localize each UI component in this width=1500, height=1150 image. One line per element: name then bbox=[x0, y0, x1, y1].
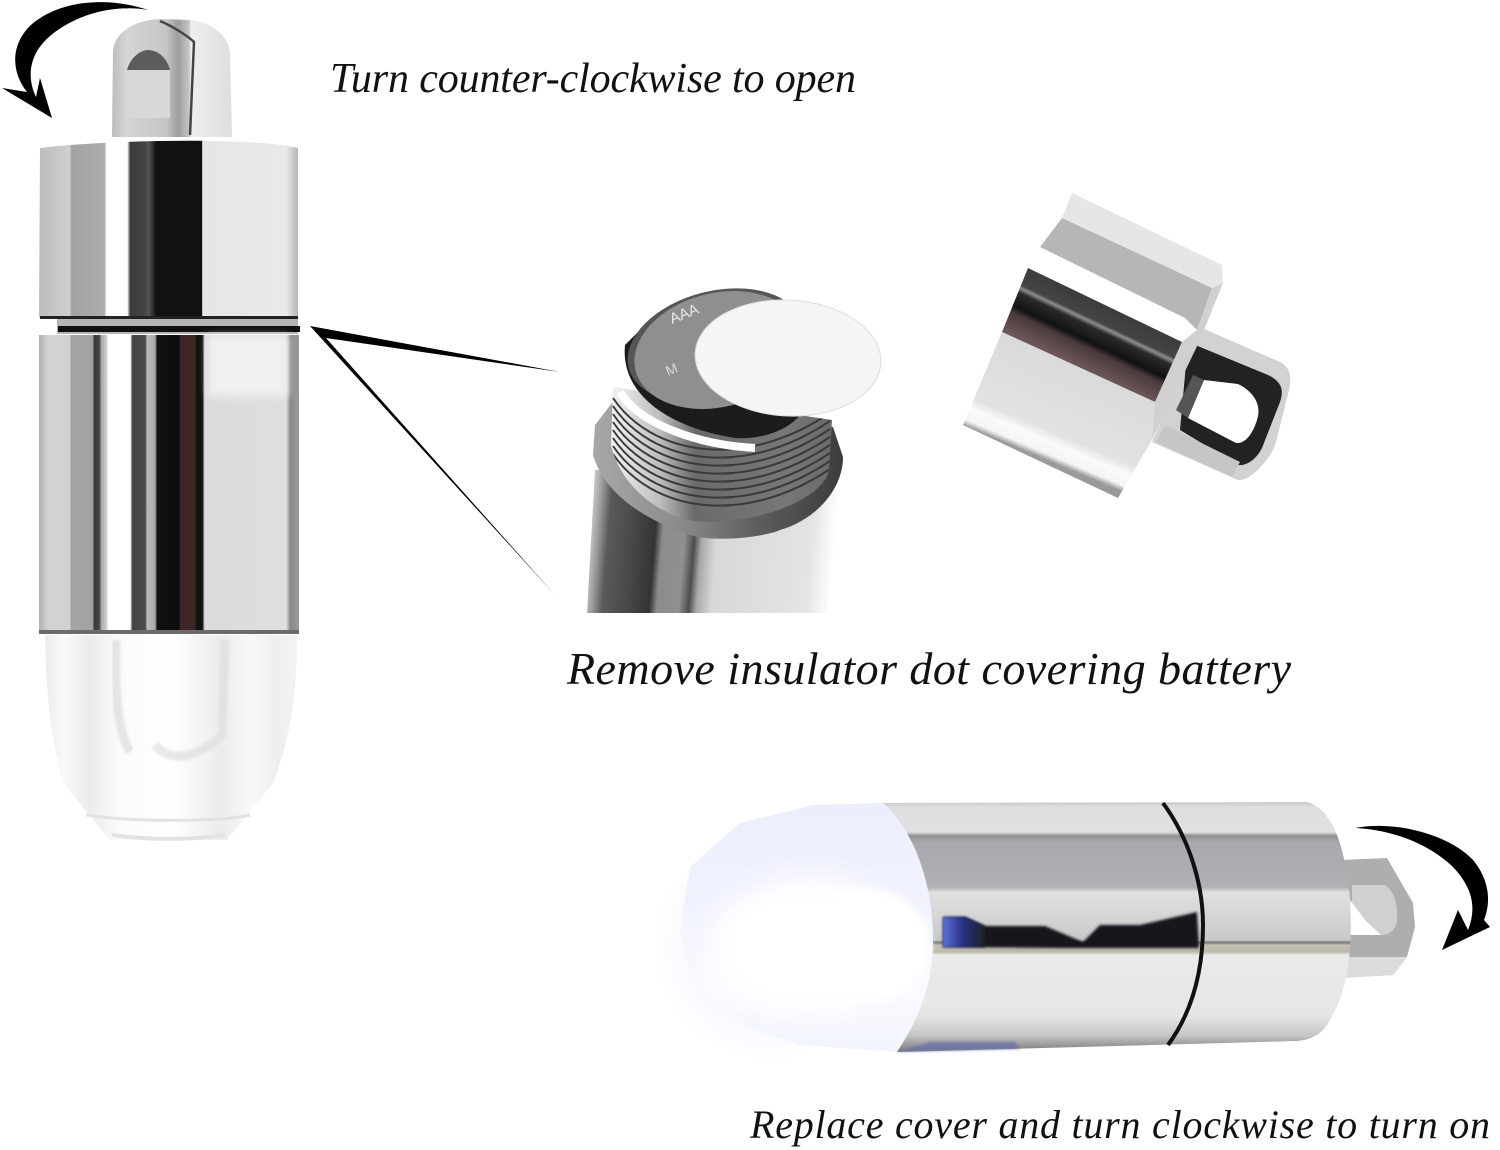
top loop bbox=[112, 19, 232, 137]
battery compartment close-up bbox=[587, 271, 884, 613]
blue reflection bbox=[943, 917, 985, 947]
thread highlight bbox=[620, 392, 755, 448]
groove bbox=[40, 316, 300, 334]
removed cap bbox=[963, 193, 1290, 498]
lower metal body bbox=[39, 335, 299, 634]
coin battery bbox=[615, 271, 817, 426]
clear lens bbox=[45, 635, 297, 840]
insulator dot bbox=[692, 295, 884, 421]
coin battery: AAA bbox=[667, 301, 701, 328]
cap loop bbox=[1152, 328, 1290, 480]
lit core bbox=[710, 877, 910, 1013]
icon: clockwise arrow bbox=[1355, 826, 1490, 950]
icon: counter-clockwise arrow bbox=[2, 2, 148, 118]
lens bbox=[680, 803, 933, 1052]
metal body bbox=[883, 802, 1351, 1052]
heading: turn counter-clockwise to open: Turn counter-clockwise to open bbox=[330, 56, 856, 102]
ledge shadow bbox=[625, 330, 800, 438]
tube flange bbox=[593, 403, 843, 539]
base shadow bbox=[897, 1042, 1020, 1052]
LED light: closed, upright bbox=[39, 19, 300, 840]
top light band bbox=[1062, 193, 1223, 288]
screw thread bbox=[611, 387, 832, 522]
instruction: remove insulator dot: Remove insulator dot covering battery bbox=[566, 643, 1292, 694]
groove line bbox=[1163, 803, 1203, 1045]
metal tube bbox=[587, 470, 840, 613]
rim bbox=[1152, 283, 1223, 440]
dark reflection band bbox=[1002, 268, 1182, 402]
gray speckled band bbox=[1040, 218, 1212, 330]
LED light: lit, horizontal bbox=[670, 802, 1415, 1052]
dark reflection bbox=[943, 912, 1199, 948]
callout lines from groove to battery bbox=[310, 326, 560, 595]
lower light band bbox=[963, 332, 1155, 498]
upper metal body bbox=[39, 141, 298, 317]
instruction: replace cover: Replace cover and turn clockwise to turn on bbox=[749, 1102, 1490, 1147]
glow halo bbox=[670, 845, 870, 1045]
coin battery: M bbox=[663, 360, 680, 379]
cap loop bbox=[1340, 858, 1415, 978]
